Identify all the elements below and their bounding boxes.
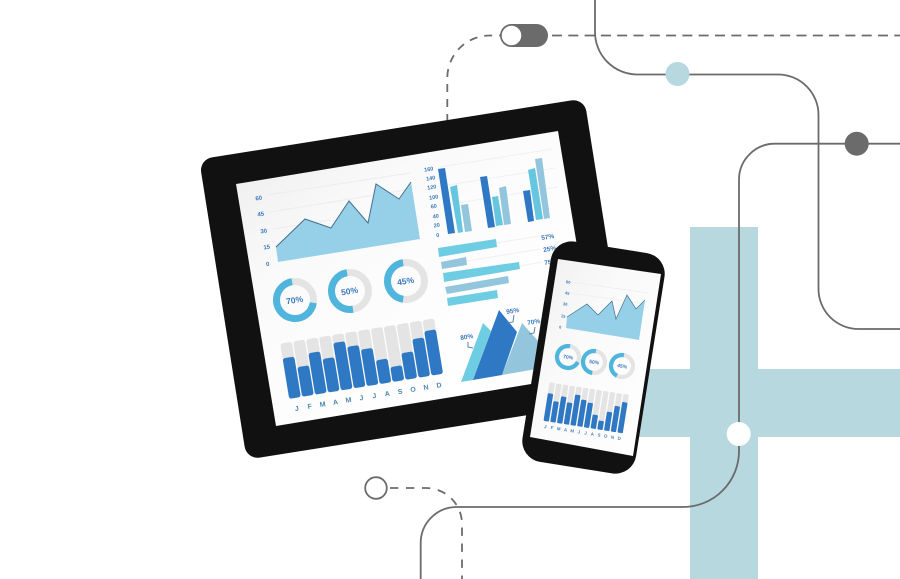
tablet grouped bar chart bbox=[424, 149, 558, 239]
tablet monthly bar chart: F bbox=[307, 403, 313, 411]
phone donut: 70% bbox=[553, 342, 583, 372]
tablet donut: 45% bbox=[385, 260, 427, 302]
phone monthly bar chart bbox=[542, 382, 629, 441]
tablet grouped bar chart: 40 bbox=[432, 214, 439, 220]
dashed line: bottom bbox=[390, 488, 462, 579]
tablet horizontal bar chart: 75% bbox=[544, 258, 558, 267]
tablet grouped bar chart: 160 bbox=[424, 166, 434, 174]
tablet monthly bar chart: A bbox=[333, 399, 339, 407]
phone area chart: 0 bbox=[559, 324, 562, 330]
tablet horizontal bar chart: 57% bbox=[541, 233, 555, 242]
tablet horizontal bar chart: 25% bbox=[543, 245, 557, 254]
phone area chart: 30 bbox=[563, 301, 569, 307]
tablet grouped bar chart: 60 bbox=[430, 204, 437, 210]
tablet mountain chart: 95% bbox=[506, 307, 520, 316]
tablet monthly bar chart: A bbox=[384, 391, 390, 398]
phone donut: 70%: 70% bbox=[563, 354, 574, 362]
tablet monthly bar chart: J bbox=[294, 406, 299, 413]
node: hollow circle bbox=[365, 477, 387, 499]
phone body bbox=[519, 238, 668, 477]
tablet monthly bar chart: J bbox=[359, 395, 364, 402]
phone monthly bar chart: F bbox=[550, 425, 554, 430]
tablet grouped bar chart: 100 bbox=[429, 194, 439, 202]
node: dark grey dot bbox=[845, 132, 869, 156]
phone monthly bar chart: A bbox=[590, 431, 595, 437]
phone area chart: 60 bbox=[566, 279, 572, 285]
tablet monthly bar chart: S bbox=[397, 388, 404, 396]
node: white dot bbox=[727, 422, 751, 446]
phone donut: 45% bbox=[607, 351, 637, 381]
tablet area chart bbox=[255, 173, 420, 268]
tablet grouped bar chart: 140 bbox=[426, 175, 436, 183]
phone bbox=[519, 238, 668, 477]
phone monthly bar chart: J bbox=[577, 429, 581, 435]
phone monthly bar chart: S bbox=[597, 432, 601, 438]
tablet donut: 50% bbox=[329, 270, 371, 312]
tablet grouped bar chart: 0 bbox=[436, 233, 440, 239]
tablet monthly bar chart: D bbox=[436, 382, 442, 390]
phone monthly bar chart: D bbox=[617, 436, 622, 441]
phone monthly bar chart: A bbox=[563, 427, 568, 433]
tablet bbox=[199, 98, 632, 460]
tablet monthly bar chart: M bbox=[345, 397, 352, 405]
tablet donut: 70%: 70% bbox=[285, 294, 304, 306]
phone monthly bar chart: J bbox=[544, 424, 547, 429]
circuit line: middle to bottom bbox=[421, 144, 900, 579]
tablet monthly bar chart bbox=[280, 318, 446, 414]
phone monthly bar chart: M bbox=[570, 428, 575, 434]
tablet area chart: 60 bbox=[255, 195, 263, 202]
toggle switch icon bbox=[500, 24, 548, 47]
tablet mountain chart: 80% bbox=[460, 333, 474, 342]
phone area chart: 45 bbox=[565, 290, 571, 296]
phone donut: 50%: 50% bbox=[589, 359, 600, 367]
phone screen bbox=[530, 259, 661, 456]
tablet donut: 45%: 45% bbox=[396, 275, 415, 287]
phone monthly bar chart: M bbox=[557, 426, 561, 432]
tablet grouped bar chart: 120 bbox=[427, 184, 437, 192]
tablet monthly bar chart: O bbox=[410, 386, 417, 394]
tablet monthly bar chart: M bbox=[319, 401, 326, 409]
tablet monthly bar chart: N bbox=[423, 384, 429, 392]
phone monthly bar chart: N bbox=[611, 435, 614, 440]
node: light blue dot bbox=[666, 62, 690, 86]
tablet area chart: 45 bbox=[257, 211, 265, 218]
phone monthly bar chart: J bbox=[584, 430, 588, 436]
tablet mountain chart: 70% bbox=[527, 318, 541, 327]
background cross bbox=[600, 227, 900, 579]
phone monthly bar chart: O bbox=[604, 433, 608, 439]
tablet donut: 50%: 50% bbox=[340, 285, 359, 297]
tablet area chart: 30 bbox=[260, 228, 268, 235]
phone donut: 45%: 45% bbox=[617, 363, 628, 371]
tablet body bbox=[199, 98, 632, 460]
tablet mountain chart bbox=[460, 307, 548, 382]
phone area chart: 15 bbox=[561, 313, 567, 319]
phone donut: 50% bbox=[581, 349, 607, 375]
tablet grouped bar chart: 20 bbox=[433, 223, 440, 229]
circuit line: top right bbox=[595, 0, 900, 329]
tablet horizontal bar chart bbox=[438, 233, 558, 306]
tablet screen bbox=[236, 131, 598, 426]
dashed line: top left bbox=[447, 36, 500, 122]
tablet monthly bar chart: J bbox=[372, 393, 377, 400]
phone area chart bbox=[559, 279, 648, 340]
tablet donut: 70% bbox=[274, 279, 316, 321]
tablet area chart: 15 bbox=[263, 244, 271, 251]
tablet area chart: 0 bbox=[266, 262, 271, 268]
dashed line: top right bbox=[552, 34, 900, 36]
